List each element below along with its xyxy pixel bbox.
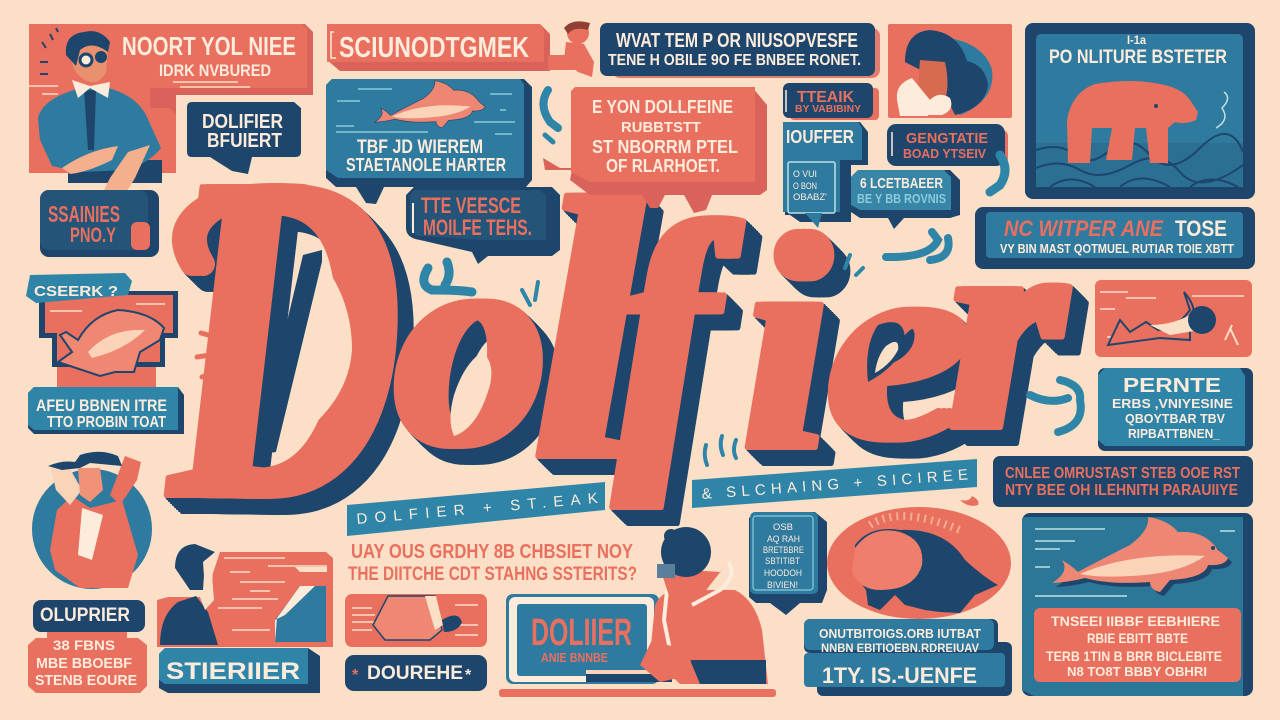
text panel: AFEU: TTO PROBIN TOAT: [47, 414, 166, 431]
label: OLUPRIER: [33, 600, 145, 632]
icon: coral animal: [1067, 81, 1198, 163]
heading banner: SCIUNODTGMEK: [327, 24, 550, 71]
title: Dolfier: i: [740, 172, 823, 515]
panel: IOUFFER with note box: IOUFFER: [786, 127, 854, 147]
callout: note bubble: SBTITIBT: [765, 556, 800, 566]
tagline: UAY OUS GRDHY: UAY OUS GRDHY 8B CHBSIET NOY: [351, 541, 634, 563]
squiggles and accents: [197, 90, 1081, 465]
callout: TTE VEESCE: TTE VEESCE: [421, 193, 521, 218]
callout: note bubble: BIVIEN!: [767, 580, 798, 590]
icon: coral badge: [131, 222, 150, 250]
text box: coral caption: [1034, 608, 1241, 682]
illustration: person stretching in blue circle: [32, 452, 152, 589]
callout: note bubble: [749, 512, 827, 615]
panel: SSAINIES PNO.Y: SSAINIES: [48, 201, 120, 227]
callout: 6 LCETBAEER: BE Y BB ROVNIS: [857, 191, 946, 206]
tagline: UAY OUS GRDHY: THE DIITCHE CDT STAHNG SSTERITS?: [348, 564, 637, 585]
band: DOLFIER STEAK: DOLFIER + ST.EAK: [356, 490, 598, 528]
callout: coral bubble E YON DOLLFEINE: [543, 87, 767, 213]
callout: 6 LCETBAEER: 6 LCETBAEER: [860, 175, 943, 192]
panel: SSAINIES PNO.Y: [40, 190, 159, 257]
note box: O VUI: [793, 169, 817, 179]
text panel: AFEU: AFEU BBNEN ITRE: [36, 396, 167, 415]
text panel: 1TY. IS.-UENFE: [804, 619, 1012, 696]
illustration: coral panel with swimming figure: [1095, 280, 1252, 357]
label: GENGTATIE: GENGTATIE: [906, 130, 988, 147]
text panel: PERNTE: ERBS ,VNIYESINE: [1112, 396, 1233, 411]
label: DOUREHE: *: [352, 667, 359, 684]
callout: note bubble: OSB: [773, 522, 793, 532]
banner: NC WITPER ANE TOSE: NC WITPER ANE: [1004, 216, 1164, 241]
text box: coral caption: TERB 1TIN B BRR BICLEBITE: [1046, 648, 1222, 664]
text panel: PERNTE: RIPBATTBNEN_: [1128, 426, 1221, 441]
text panel: PERNTE: [1098, 368, 1253, 451]
text panel: 1TY. IS.-UENFE: NNBN EBITIOEBN.RDREIUAV: [821, 641, 979, 655]
label: STIERIIER: STIERIIER: [166, 658, 300, 685]
banner: NC WITPER ANE TOSE: TOSE: [1175, 216, 1227, 241]
callout: TTE VEESCE: MOILFE TEHS.: [423, 215, 532, 240]
icon: dolphin: [374, 81, 485, 128]
text panel: CNLEE OMRUSTAST: NTY BEE OH ILEHNITH PARAUIIYE: [1005, 482, 1238, 499]
panel: dolphin card: [1022, 513, 1253, 696]
panel: PO NLITURE BSTETER with animal: [1025, 23, 1255, 199]
callout: note bubble: BRETBBRE: [763, 545, 804, 555]
icon: man with glasses: [38, 31, 162, 198]
illustration: seal in coral ellipse: [827, 507, 1011, 619]
text panel: coral: STENB EOURE: [35, 672, 137, 689]
panel: blue speech bubble with dolphin: STAETANOLE HARTER: [346, 155, 506, 175]
label: GENGTATIE: [887, 124, 1008, 166]
title: Dolfier: f: [612, 160, 734, 509]
icon: small climbing figure: [548, 21, 594, 77]
callout: DOLIFIER BFUIERT: DOLIFIER: [202, 111, 283, 133]
label: TTEAIK: BY VABIBINY: [795, 104, 861, 115]
panel: IOUFFER with note box: [783, 122, 868, 228]
title: Dolfier: o: [392, 176, 539, 509]
band: DOLFIER STEAK: [347, 482, 605, 536]
text panel: WVAT TEM: [600, 23, 880, 78]
panel: blue speech bubble with dolphin: [326, 79, 532, 204]
text panel: coral: 38 FBNS: [53, 637, 115, 653]
icon: fish: [58, 310, 164, 376]
icon: large dolphin: [1052, 517, 1232, 596]
text panel: AFEU: [28, 387, 184, 434]
label: TTEAIK: TTEAIK: [797, 89, 854, 106]
man: [160, 596, 218, 645]
text box: coral caption: N8 TO8T BBBY OBHRI: [1067, 664, 1207, 679]
callout: coral bubble E YON DOLLFEINE: RUBBTSTT: [621, 119, 701, 136]
tag: CSEERK ?: [34, 283, 118, 300]
callout: coral bubble E YON DOLLFEINE: ST NBORRM PTEL: [592, 137, 738, 157]
callout: 6 LCETBAEER: [851, 170, 960, 229]
illustration: woman at laptop: [499, 527, 776, 697]
panel: fish card with tag: [26, 273, 178, 388]
laptop: [506, 594, 672, 684]
callout: note bubble: HOODOH: [764, 568, 802, 578]
text panel: PERNTE: QBOYTBAR TBV: [1125, 411, 1225, 426]
tag: [26, 273, 132, 303]
text panel: CNLEE OMRUSTAST: [993, 456, 1253, 507]
small coral splash: [960, 496, 978, 506]
panel: SSAINIES PNO.Y: PNO.Y: [70, 224, 116, 247]
label: TTEAIK: [783, 83, 879, 120]
callout: TTE VEESCE: [406, 187, 560, 264]
panel: top-left coral banner with man: [29, 24, 313, 198]
letter counters of D, o and e: [255, 250, 905, 455]
title: Dolfier: r: [946, 160, 1062, 493]
label: DOUREHE: *: [465, 667, 472, 684]
text box: coral caption: TNSEEI IIBBF EEBHIERE: [1051, 613, 1220, 629]
heading banner: SCIUNODTGMEK: SCIUNODTGMEK: [339, 32, 529, 64]
banner: NC WITPER ANE TOSE: VY BIN MAST QOTMUEL RUTIAR TOIE XBTT: [1000, 241, 1234, 256]
label: OLUPRIER: OLUPRIER: [40, 605, 130, 626]
note box: OBABZ': [793, 192, 827, 202]
tagline: UAY OUS GRDHY: [348, 541, 637, 585]
text panel: WVAT TEM: WVAT TEM P OR NIUSOPVESFE: [616, 30, 858, 52]
callout: coral bubble E YON DOLLFEINE: E YON DOLLFEINE: [592, 97, 733, 117]
person: [640, 527, 768, 684]
callout: DOLIFIER BFUIERT: BFUIERT: [207, 130, 282, 152]
text panel: CNLEE OMRUSTAST: CNLEE OMRUSTAST STEB OOE RST: [1005, 465, 1240, 482]
text panel: coral: [28, 632, 147, 693]
title: Dolfier: l: [530, 123, 635, 538]
note box: [788, 162, 835, 228]
panel: PO NLITURE BSTETER with animal: I-1a: [1127, 33, 1146, 47]
illustration: deer/animal panel: [345, 594, 487, 647]
text panel: 1TY. IS.-UENFE: 1TY. IS.-UENFE: [822, 663, 977, 688]
title: Dolfier: [163, 77, 1062, 598]
title: Dolfier: e: [824, 197, 962, 495]
label: DOUREHE: [345, 655, 487, 691]
illustration: man with panel: [157, 544, 333, 647]
blue screen: [275, 586, 326, 642]
text panel: PERNTE: PERNTE: [1123, 375, 1221, 397]
callout: coral bubble E YON DOLLFEINE: OF RLARHOET.: [606, 156, 720, 176]
band: SLCHAING SICIREE: & SLCHAING + SICIREE: [701, 466, 969, 503]
text panel: 1TY. IS.-UENFE: ONUTBITOIGS.ORB IUTBAT: [819, 626, 981, 641]
laptop: ANIE BNNBE: [541, 650, 608, 665]
subheading: IDRK NVBURED: IDRK NVBURED: [159, 61, 271, 80]
heading: NOORT YOL NIEE: NOORT YOL NIEE: [122, 31, 296, 61]
banner: NC WITPER ANE TOSE: [975, 207, 1255, 269]
label: DOUREHE: DOUREHE: [367, 663, 463, 684]
water lines: [1036, 143, 1243, 187]
label: STIERIIER: [159, 648, 320, 693]
note box: O BON: [793, 181, 817, 191]
panel: PO NLITURE BSTETER with animal: PO NLITURE BSTETER: [1049, 47, 1227, 68]
callout: note bubble: AQ RAH: [767, 534, 800, 544]
text panel: WVAT TEM: TENE H OBILE 9O FE BNBEE RONET.: [608, 52, 861, 69]
title: Dolfier: D: [163, 77, 392, 598]
illustration: portrait of embracing person: [888, 24, 1012, 118]
label: GENGTATIE: BOAD YTSEIV: [903, 146, 986, 161]
band: SLCHAING SICIREE: [692, 459, 977, 508]
laptop: DOLIIER: [531, 612, 632, 654]
text box: coral caption: RBIE EBITT BBTE: [1087, 630, 1188, 646]
text panel: coral: MBE BBOEBF: [36, 655, 132, 672]
panel: blue speech bubble with dolphin: TBF JD WIEREM: [357, 137, 483, 158]
callout: DOLIFIER BFUIERT: [187, 102, 301, 174]
